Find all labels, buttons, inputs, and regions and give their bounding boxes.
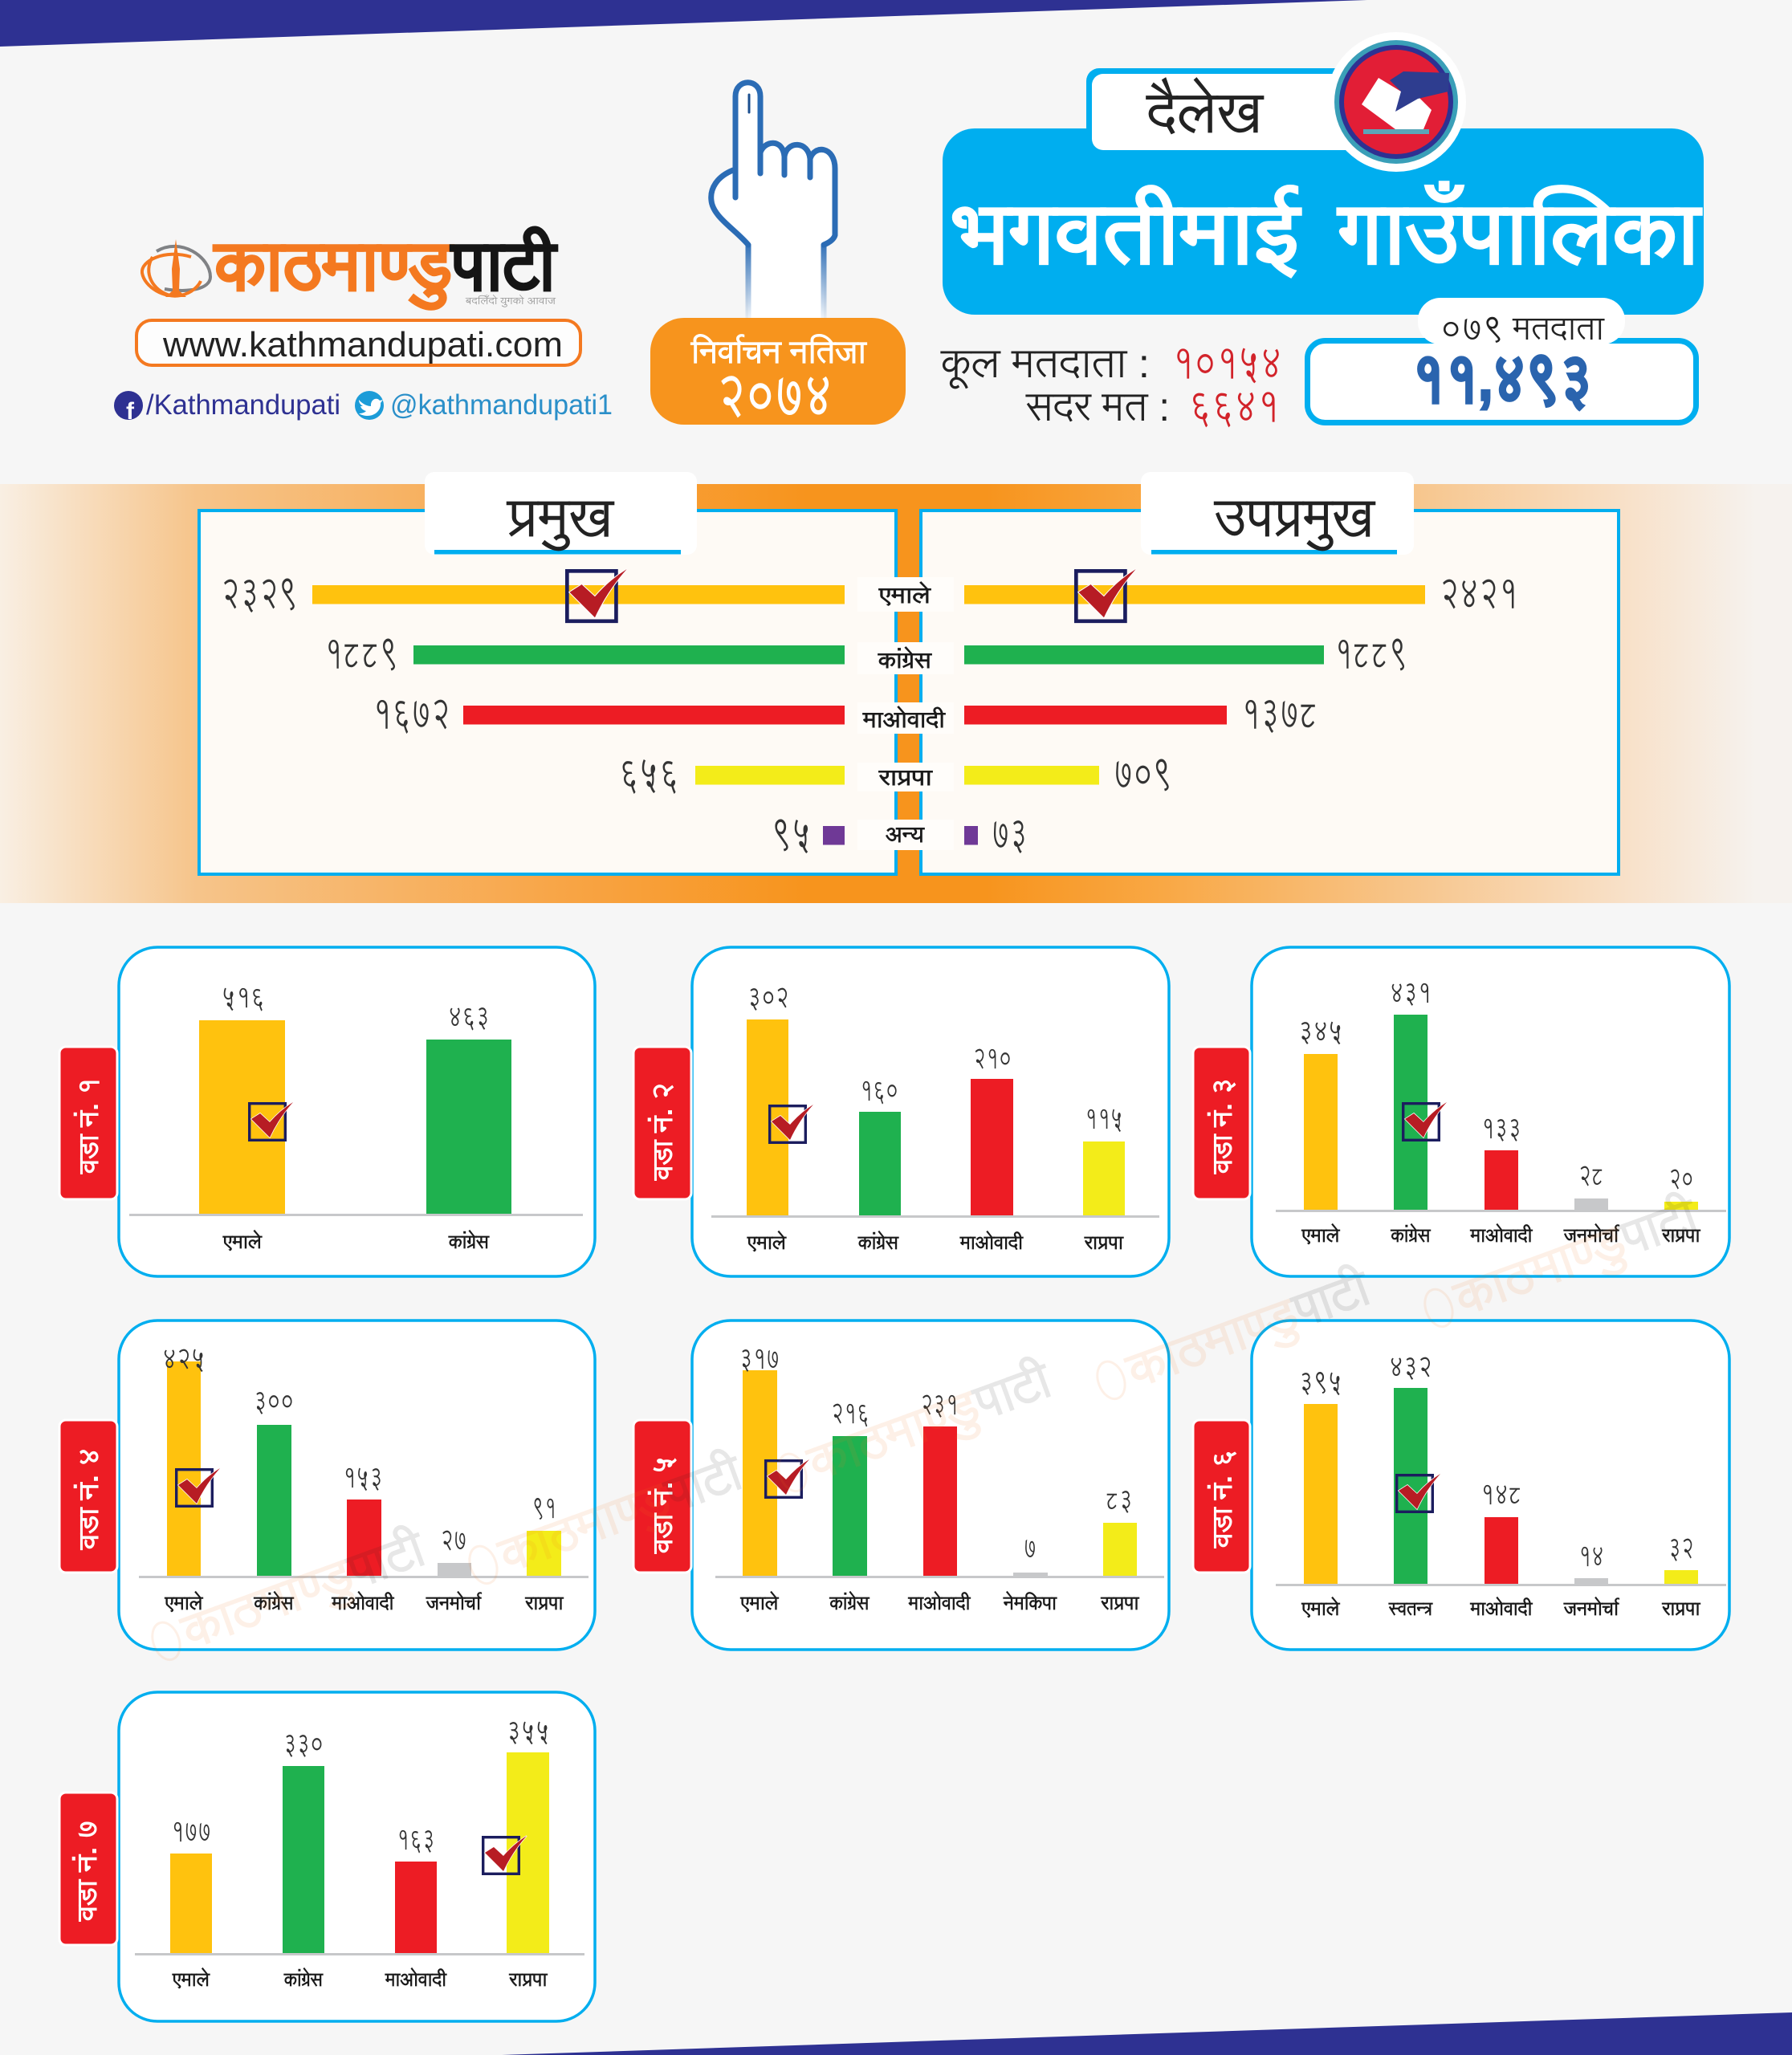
icon: winner check (1403, 1102, 1447, 1140)
bar: नेमकिपा: नेमकिपा (1003, 1590, 1057, 1613)
bar: एमाले (199, 983, 285, 1252)
bar: कांग्रेस: कांग्रेस (448, 1229, 490, 1252)
logo: Kathmandupati (142, 226, 558, 310)
social: facebook: /Kathmandupati (146, 389, 340, 421)
heading: उपप्रमुख (1141, 472, 1414, 555)
watermark 1 (144, 1519, 435, 1674)
bar: माओवादी: माओवादी (385, 1967, 447, 1990)
icon: voting hand (711, 83, 835, 318)
icon: facebook (114, 391, 143, 425)
row: अन्य: ९५ (772, 812, 812, 857)
watermark 2: काठमाण्डु (491, 1471, 680, 1587)
panel card (692, 1320, 1169, 1650)
row: माओवादी: १३७८ (1241, 691, 1318, 736)
bar: राप्रपा: ८३ (1106, 1485, 1133, 1516)
ward tag: वडा नं. ३ (1206, 1077, 1237, 1174)
bottom navy band (502, 2012, 1792, 2055)
bar: कांग्रेस: कांग्रेस (254, 1590, 295, 1613)
total voters text: १०१५४ (1172, 340, 1282, 387)
ward tag: वडा नं. २ (646, 1082, 678, 1181)
bar: माओवादी: माओवादी (1470, 1596, 1533, 1619)
heading: प्रमुख (425, 472, 697, 555)
watermark 1: पाटी (340, 1519, 434, 1599)
icon: winner check (177, 1468, 220, 1506)
district tab: दैलेख (1086, 68, 1365, 150)
bar: कांग्रेस (283, 1729, 324, 1990)
bar: एमाले: ३१७ (739, 1344, 780, 1374)
bar: माओवादी: १४८ (1480, 1479, 1522, 1510)
bar: जनमोर्चा (1563, 1161, 1620, 1246)
2079 voters box: ११,४९३ (1411, 345, 1593, 413)
row: अन्य: ७३ (992, 812, 1028, 857)
icon: facebook: f (126, 398, 135, 425)
bar: राप्रपा (1661, 1164, 1701, 1246)
bar: एमाले: १७७ (171, 1817, 211, 1847)
bar: राप्रपा: राप्रपा (1661, 1225, 1701, 1246)
row: माओवादी: माओवादी (862, 705, 946, 732)
bar: माओवादी: १६३ (397, 1825, 435, 1855)
bar: राप्रपा: २० (1668, 1164, 1694, 1194)
bar: एमाले: एमाले (172, 1967, 211, 1990)
2079 voters box: ०७९ मतदाता (1440, 311, 1605, 347)
bar: राप्रपा (1100, 1485, 1140, 1613)
ward 2 chart (633, 947, 1169, 1276)
icon: winner check (766, 1459, 809, 1497)
bar: एमाले: एमाले (1301, 1223, 1341, 1246)
bar: स्वतन्त्र (1388, 1352, 1433, 1619)
bar: जनमोर्चा: जनमोर्चा (1563, 1596, 1620, 1619)
bar: एमाले (747, 983, 789, 1253)
row: कांग्रेस: १८८९ (324, 631, 398, 676)
icon: ballot emblem (1326, 32, 1466, 172)
bar: कांग्रेस (426, 1002, 511, 1252)
bar: एमाले (739, 1344, 780, 1613)
social: twitter: @kathmandupati1 (390, 389, 613, 421)
bar: कांग्रेस: कांग्रेस (829, 1590, 870, 1613)
bar: माओवादी: २३१ (920, 1390, 959, 1420)
bar: राप्रपा: ११५ (1085, 1104, 1123, 1134)
watermark 1: काठमाण्डु (174, 1548, 363, 1663)
bar: माओवादी: माओवादी (1470, 1223, 1533, 1246)
row: एमाले (221, 571, 1518, 616)
bar: कांग्रेस: ४३१ (1390, 978, 1432, 1008)
bar: एमाले: एमाले (222, 1229, 263, 1252)
logo word: काठमाण्डु: काठमाण्डु (213, 229, 454, 310)
bar: माओवादी (908, 1390, 971, 1613)
bar: माओवादी: २१० (973, 1044, 1012, 1074)
logo tagline: बदलिँदो युगको आवाज (465, 294, 556, 307)
row: कांग्रेस (324, 631, 1407, 676)
bar: जनमोर्चा: १४ (1578, 1541, 1604, 1572)
watermark 3: पाटी (966, 1350, 1060, 1430)
bar: कांग्रेस: १६० (860, 1076, 898, 1106)
icon: twitter (355, 391, 384, 420)
heading: उपप्रमुख: उपप्रमुख (1214, 488, 1376, 551)
total voters text: कूल मतदाता : (940, 341, 1150, 390)
ward tag (633, 1420, 691, 1573)
total voters text (940, 340, 1282, 390)
bar: जनमोर्चा: २८ (1578, 1161, 1604, 1191)
title text: second word: गाउँपालिका (1337, 181, 1703, 282)
bar: माओवादी: १५३ (343, 1463, 383, 1493)
row: कांग्रेस: १८८९ (1334, 631, 1407, 676)
icon: winner check (250, 1102, 293, 1140)
ward tag (59, 1047, 117, 1199)
ward tag (59, 1420, 117, 1573)
watermark 4 (1089, 1258, 1380, 1413)
bar: कांग्रेस (254, 1386, 295, 1613)
row: राप्रपा: ६५६ (619, 751, 679, 796)
website pill: www.kathmandupati.com (162, 325, 563, 364)
bar: कांग्रेस: ४६३ (448, 1002, 490, 1032)
bar: कांग्रेस: कांग्रेस (283, 1967, 324, 1990)
watermark 2 (461, 1443, 752, 1597)
title panel (943, 128, 1704, 315)
bar: एमाले: एमाले (1301, 1596, 1341, 1619)
badge: election results 2074: निर्वाचन नतिजा (690, 333, 867, 370)
watermark 3 (770, 1350, 1061, 1505)
2079 voters box (1307, 298, 1696, 422)
panel: mayor results (199, 511, 896, 874)
bar: राप्रपा: राप्रपा (1661, 1598, 1701, 1619)
panel card (1252, 1320, 1729, 1650)
row: अन्य: अन्य (886, 823, 925, 847)
icon: deputy mayor winner check (1076, 569, 1136, 621)
bar: राप्रपा: राप्रपा (1100, 1593, 1140, 1613)
bar: कांग्रेस: २१६ (831, 1398, 870, 1429)
watermark 4: काठमाण्डु (1119, 1287, 1308, 1402)
bar: स्वतन्त्र: स्वतन्त्र (1388, 1598, 1433, 1619)
bar: एमाले (1299, 1367, 1342, 1619)
top navy band (0, 0, 1367, 47)
bar: कांग्रेस (1390, 978, 1432, 1246)
ward tag: वडा नं. ७ (71, 1820, 102, 1922)
bar: माओवादी (332, 1463, 394, 1613)
valid votes text: ६६४१ (1189, 384, 1280, 430)
bar: राप्रपा (1083, 1104, 1125, 1253)
bar: माओवादी: माओवादी (908, 1590, 971, 1613)
bar: माओवादी (1470, 1113, 1533, 1246)
bar: कांग्रेस (829, 1398, 870, 1613)
bar: जनमोर्चा (426, 1525, 483, 1613)
bar: एमाले: एमाले (164, 1590, 204, 1613)
orange band (0, 484, 1792, 903)
ward tag (1193, 1047, 1250, 1199)
bar: माओवादी (1470, 1479, 1533, 1619)
bar: नेमकिपा (1003, 1533, 1057, 1613)
row: माओवादी: १६७२ (373, 691, 450, 736)
ward 5 chart (633, 1320, 1169, 1650)
bar: राप्रपा: राप्रपा (1084, 1232, 1124, 1253)
badge: election results 2074 (650, 318, 906, 426)
ward tag: वडा नं. १ (72, 1077, 104, 1174)
watermark 5: काठमाण्डु (1447, 1215, 1635, 1330)
bar: एमाले: ३४५ (1298, 1016, 1343, 1047)
row: एमाले: एमाले (878, 580, 931, 608)
panel card (119, 1692, 595, 2021)
ward 4 chart (59, 1320, 595, 1650)
badge: election results 2074: २०७४ (717, 365, 833, 426)
bar: कांग्रेस: कांग्रेस (1391, 1223, 1432, 1246)
bar: माओवादी: माओवादी (959, 1230, 1024, 1253)
row: अन्य (772, 812, 1028, 857)
bar: एमाले: ३०२ (747, 983, 789, 1013)
icon: mayor winner check (567, 569, 627, 621)
bar: नेमकिपा: ७ (1024, 1533, 1037, 1564)
bar: एमाले: ५१६ (222, 983, 265, 1013)
panel card (1252, 947, 1729, 1276)
bar: कांग्रेस: ३०० (254, 1386, 294, 1417)
bar: एमाले: ४२५ (162, 1344, 206, 1374)
bar: एमाले: एमाले (739, 1590, 780, 1613)
title text: first word: भगवतीमाई (952, 184, 1301, 282)
panel: deputy mayor results (921, 511, 1619, 874)
watermark 2: पाटी (657, 1443, 751, 1523)
bar: स्वतन्त्र: ४३२ (1389, 1352, 1432, 1382)
icon: globe and tower (142, 239, 210, 297)
bar: राप्रपा (1661, 1533, 1701, 1619)
bar: राप्रपा: ९१ (532, 1493, 556, 1524)
watermark 5: पाटी (1612, 1186, 1706, 1266)
row: राप्रपा: राप्रपा (878, 766, 933, 790)
bar: जनमोर्चा (1563, 1541, 1620, 1619)
ward tag: वडा नं. ६ (1206, 1449, 1237, 1548)
district tab: दैलेख: दैलेख (1146, 77, 1265, 144)
bar: एमाले: ३९५ (1299, 1367, 1342, 1398)
ward tag (633, 1047, 691, 1199)
row: एमाले: २३२९ (221, 571, 298, 616)
ward tag: वडा नं. ४ (72, 1447, 104, 1550)
heading: प्रमुख: प्रमुख (507, 488, 615, 551)
ward 6 chart (1193, 1320, 1729, 1650)
bar: एमाले (1298, 1016, 1343, 1246)
ward tag (59, 1793, 117, 1945)
bar: जनमोर्चा: २७ (440, 1525, 467, 1556)
bar: राप्रपा: राप्रपा (524, 1593, 564, 1613)
bar: कांग्रेस: ३३० (283, 1729, 324, 1760)
row: कांग्रेस: कांग्रेस (878, 645, 932, 673)
bar: राप्रपा: ३५५ (507, 1716, 550, 1747)
bar: माओवादी: १३३ (1481, 1113, 1521, 1144)
icon: winner check (483, 1836, 527, 1874)
bar: एमाले (170, 1817, 212, 1990)
watermark 3: काठमाण्डु (800, 1379, 989, 1495)
panel card (692, 947, 1169, 1276)
ward 1 chart (59, 947, 595, 1276)
bar: जनमोर्चा: जनमोर्चा (1563, 1223, 1620, 1246)
panel card (119, 1320, 595, 1650)
valid votes text (1025, 384, 1280, 430)
row: राप्रपा (619, 751, 1172, 796)
row: राप्रपा: ७०९ (1114, 751, 1172, 796)
bar: राप्रपा: राप्रपा (508, 1969, 548, 1990)
panel card (119, 947, 595, 1276)
bar: राप्रपा: ३२ (1668, 1533, 1694, 1564)
icon: winner check (1397, 1474, 1440, 1512)
bar: कांग्रेस: कांग्रेस (857, 1230, 899, 1253)
bar: राप्रपा (507, 1716, 550, 1990)
row: माओवादी (373, 691, 1318, 736)
ward tag (1193, 1420, 1250, 1573)
ward 3 chart (1193, 947, 1729, 1276)
bar: माओवादी (385, 1825, 447, 1990)
valid votes text: सदर मत : (1025, 385, 1170, 429)
ward tag: वडा नं. ५ (646, 1455, 678, 1554)
bar: राप्रपा (524, 1493, 564, 1613)
logo word: पाटी: पाटी (450, 226, 558, 304)
bar: एमाले (162, 1344, 206, 1613)
bar: एमाले: एमाले (747, 1230, 788, 1253)
bar: माओवादी (959, 1044, 1024, 1253)
watermark 5 (1416, 1186, 1708, 1341)
bar: जनमोर्चा: जनमोर्चा (426, 1590, 483, 1613)
icon: winner check (770, 1105, 813, 1142)
bar: कांग्रेस (857, 1076, 901, 1253)
bar: माओवादी: माओवादी (332, 1590, 394, 1613)
ward 7 chart (59, 1692, 595, 2021)
watermark 4: पाटी (1285, 1258, 1379, 1338)
row: एमाले: २४२१ (1440, 571, 1518, 616)
